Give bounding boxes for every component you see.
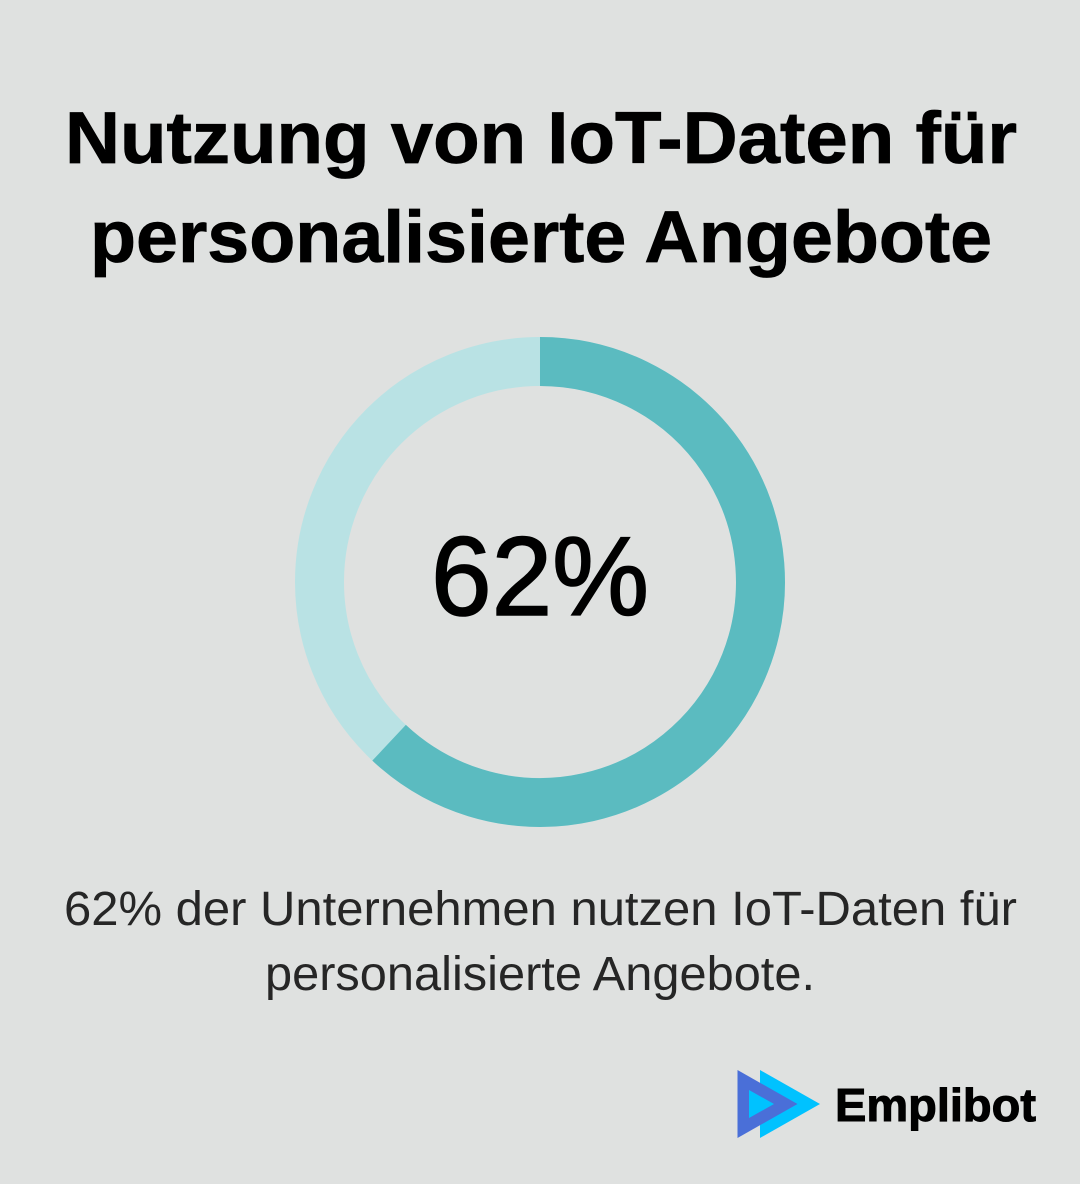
description text bbox=[64, 883, 1017, 1001]
logo: Emplibot bbox=[738, 1070, 1036, 1138]
title: personalisierte Angebote bbox=[90, 197, 992, 278]
donut chart: 62% bbox=[320, 362, 760, 802]
center value: 62% bbox=[431, 514, 649, 639]
description text: personalisierte Angebote. bbox=[265, 948, 815, 1001]
brand name: Emplibot bbox=[835, 1079, 1036, 1131]
description text: 62% der Unternehmen nutzen IoT-Daten für bbox=[64, 883, 1017, 936]
title bbox=[65, 98, 1017, 278]
icon: play triangles bbox=[738, 1070, 820, 1138]
title: Nutzung von IoT-Daten für bbox=[65, 98, 1017, 179]
